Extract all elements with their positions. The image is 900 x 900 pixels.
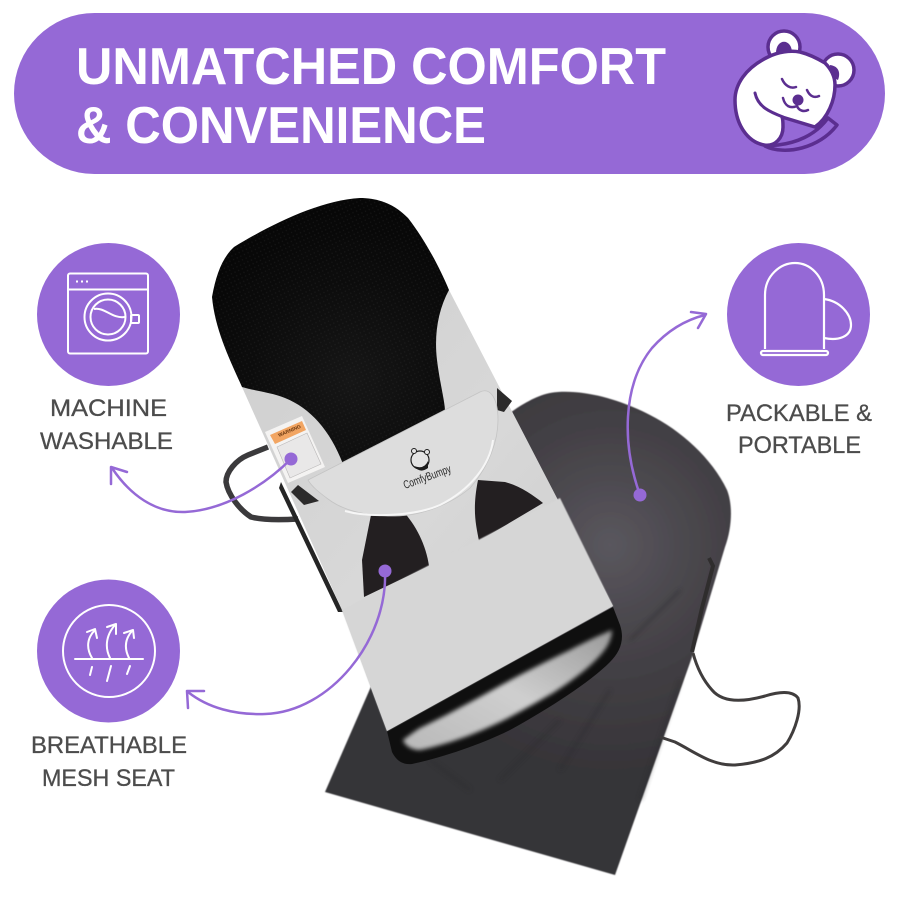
warning label <box>265 416 325 483</box>
panel: machine washable <box>37 243 180 455</box>
label: PORTABLE <box>738 432 861 459</box>
bottom frame tray <box>387 607 622 764</box>
lower fold band <box>342 498 613 731</box>
arrow: packable callout <box>628 312 706 502</box>
icon: airflow through mesh <box>63 605 155 697</box>
title <box>76 38 666 155</box>
title: & CONVENIENCE <box>76 97 486 155</box>
mesh seat openings <box>362 480 543 597</box>
product photo: carry bag <box>325 392 799 875</box>
black mesh back panel <box>212 198 449 464</box>
gray seat body <box>242 290 613 731</box>
brand bear mark <box>411 448 430 471</box>
icon: carry bag outline <box>761 263 851 355</box>
label <box>40 395 173 455</box>
label: MACHINE <box>50 395 167 422</box>
warning label: WARNING <box>277 424 302 439</box>
seat tubular handle <box>226 447 298 520</box>
product photo: bouncer seat <box>212 198 622 764</box>
label: BREATHABLE <box>31 732 187 759</box>
pocket flap with brand logo <box>308 391 498 516</box>
rear dark frame edge <box>279 482 343 612</box>
panel: breathable mesh seat <box>31 580 187 792</box>
icon: sleeping bear logo <box>735 31 854 150</box>
header banner <box>14 13 885 174</box>
panel: packable and portable <box>726 243 872 459</box>
side buckles <box>291 388 512 505</box>
label <box>726 400 872 459</box>
title: UNMATCHED COMFORT <box>76 38 666 96</box>
label: WASHABLE <box>40 428 173 455</box>
bag strap <box>660 653 799 765</box>
bag wrinkles <box>430 590 680 800</box>
arrow: mesh callout <box>187 564 392 714</box>
brand name: ComfyBumpy <box>402 463 453 492</box>
arrow: washable callout <box>111 452 298 512</box>
label: MESH SEAT <box>42 765 175 792</box>
label: PACKABLE & <box>726 400 872 427</box>
icon: washing machine <box>68 274 148 354</box>
label <box>31 732 187 792</box>
